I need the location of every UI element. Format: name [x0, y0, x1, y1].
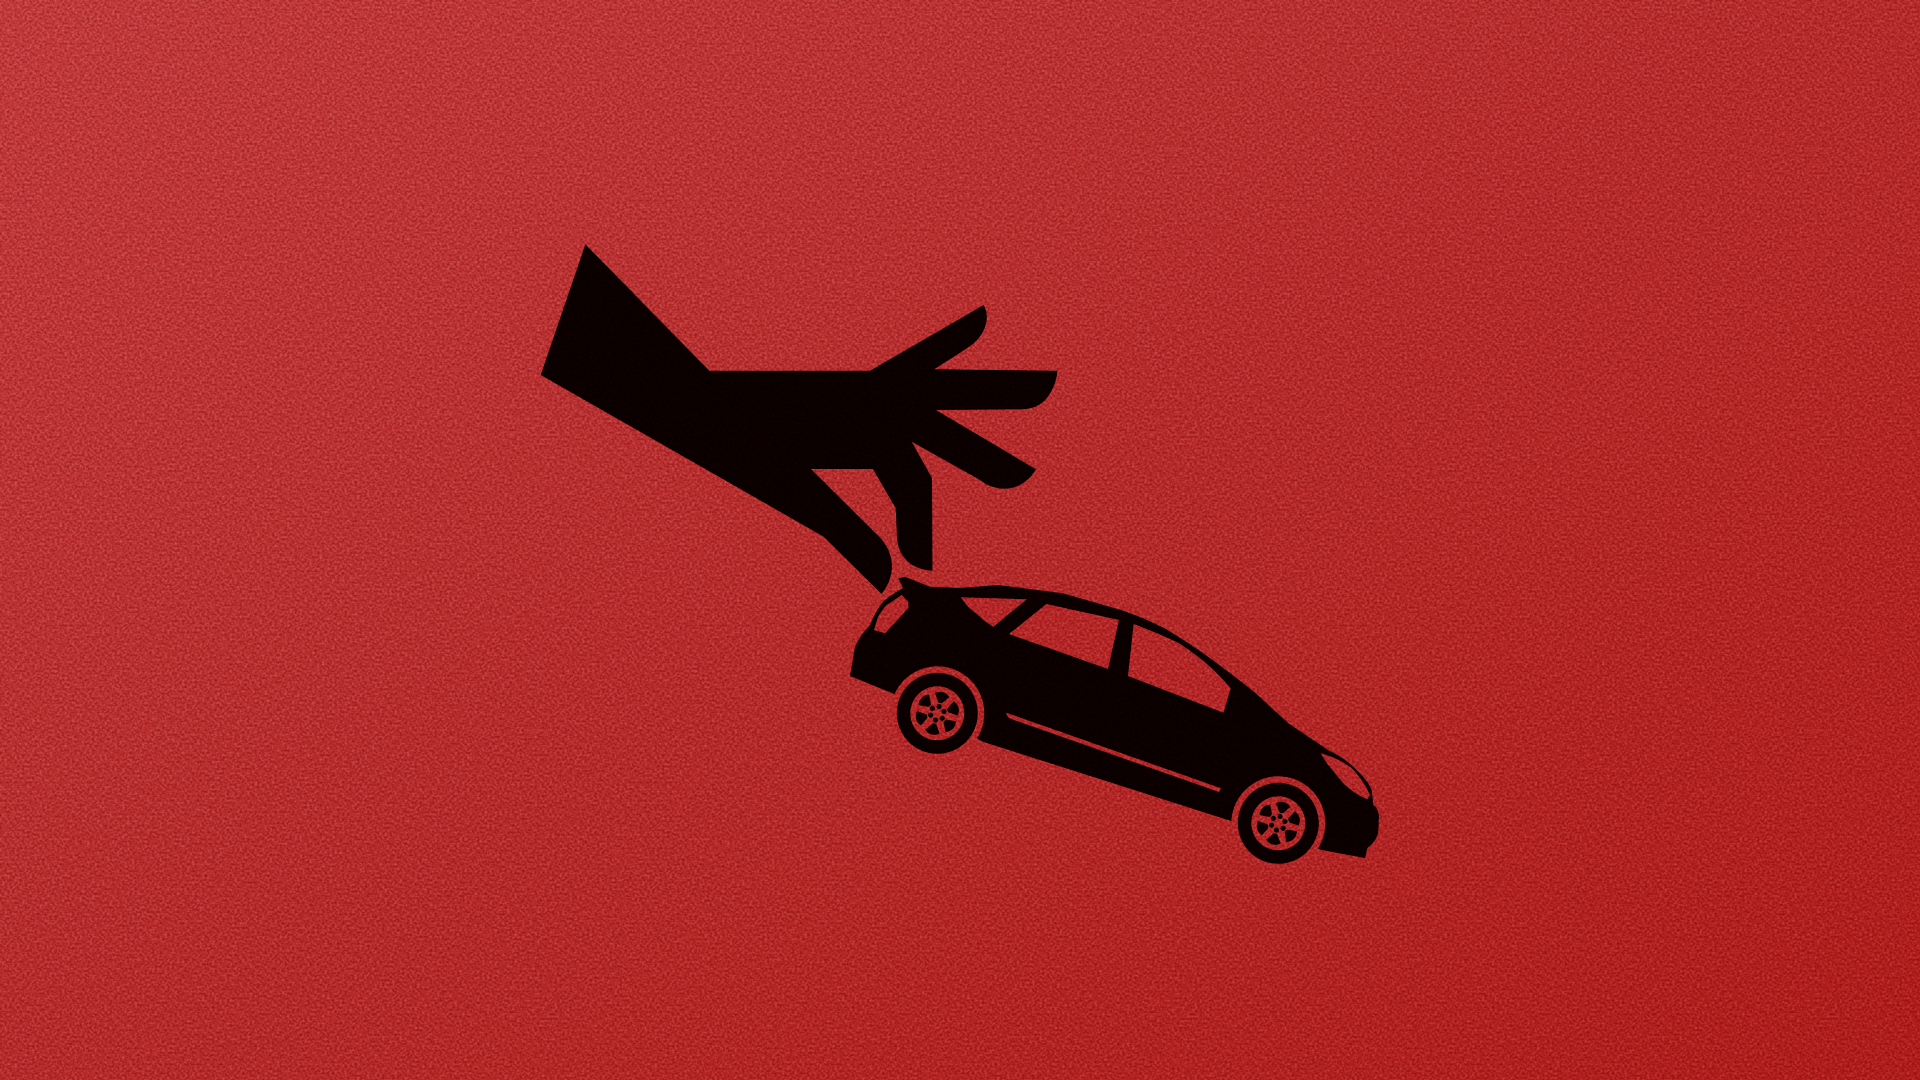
- car body: [850, 577, 1379, 858]
- car front side window: [1128, 624, 1231, 713]
- icon: hand silhouette: [541, 244, 1058, 594]
- icon: car: [850, 577, 1379, 870]
- car door sill strip: [1006, 713, 1221, 792]
- car rear side window: [1009, 604, 1119, 669]
- car headlight: [1321, 753, 1370, 799]
- car rear quarter window: [961, 597, 1027, 627]
- rear wheel: [890, 666, 984, 760]
- front wheel: [1231, 776, 1325, 870]
- car tail light: [874, 595, 908, 633]
